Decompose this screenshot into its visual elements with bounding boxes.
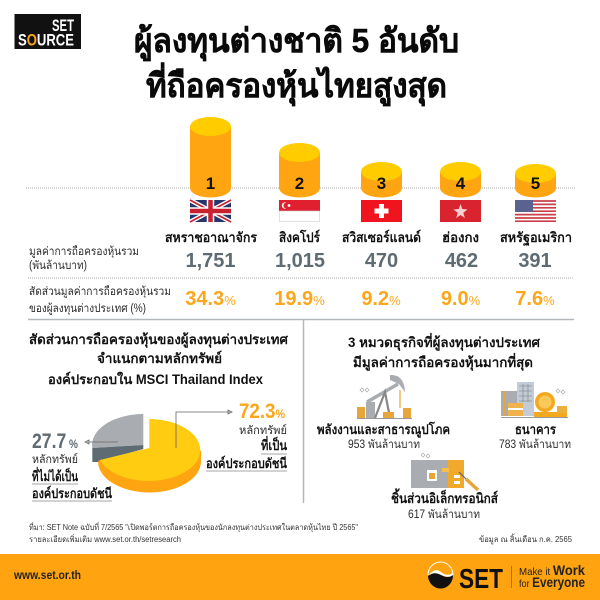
panel heading: องค์ประกอบใน MSCI Thailand Index [48, 371, 263, 387]
holding values: 462 [445, 250, 478, 272]
row label: share: ของผู้ลงทุนต่างประเทศ (%) [29, 302, 146, 315]
cylinder 5 [515, 164, 556, 198]
country names: สหรัฐอเมริกา [500, 230, 572, 247]
row label: holding value [29, 245, 139, 272]
share values [185, 288, 555, 310]
share values: 9.0% [441, 288, 481, 310]
share values: 19.9% [274, 288, 325, 310]
sector: energy [317, 420, 450, 451]
panel heading [29, 332, 288, 387]
tagline: for Everyone [519, 575, 585, 590]
country names: ฮ่องกง [442, 230, 479, 245]
holding values: 391 [518, 250, 552, 272]
cylinder 2 [279, 143, 320, 198]
flag: Singapore [279, 200, 320, 222]
share values: 9.2% [361, 288, 401, 310]
panel heading: มีมูลค่าการถือครองหุ้นมากที่สุด [353, 352, 533, 371]
sector: banking [499, 422, 571, 451]
SET logo: SET [459, 563, 503, 594]
title [134, 22, 459, 107]
callout: 27.7%: 27.7 % [32, 430, 78, 453]
arrow: to 27.7% [85, 440, 118, 444]
panel heading [348, 332, 540, 371]
cylinder 4 [440, 162, 481, 198]
flag: Hong Kong [440, 200, 481, 222]
cylinder 5: 5 [531, 174, 540, 193]
callout: 72.3%: องค์ประกอบดัชนี [206, 455, 288, 471]
share values: 7.6% [515, 288, 555, 310]
holding values: 1,015 [275, 250, 325, 272]
icon: bank and coins [501, 382, 568, 418]
sector: banking: 783 พันล้านบาท [499, 438, 571, 451]
holding values [185, 250, 552, 272]
logo: SET Source: SET [52, 16, 74, 35]
bar chart: cylinders [190, 117, 556, 198]
sector: energy: พลังงานและสาธารณูปโภค [317, 420, 450, 438]
panel: ownership by index membership [29, 332, 288, 501]
panel: top 3 sectors [317, 332, 571, 521]
icon: electronic board [411, 453, 478, 490]
footer band [0, 554, 600, 600]
cylinder 2: 2 [295, 174, 304, 193]
share values: 34.3% [185, 288, 236, 310]
callout: 72.3%: ที่เป็น [261, 435, 288, 453]
panel heading: 3 หมวดธุรกิจที่ผู้ลงทุนต่างประเทศ [348, 332, 540, 351]
cylinder 1: 1 [206, 174, 215, 193]
tagline: Make it Work [519, 562, 585, 578]
panel heading: จำแนกตามหลักทรัพย์ [97, 350, 222, 366]
panel heading: สัดส่วนการถือครองหุ้นของผู้ลงทุนต่างประเทศ [29, 332, 288, 348]
callout: 27.7%: องค์ประกอบดัชนี [32, 485, 113, 501]
callout: 72.3%: 72.3% [239, 400, 285, 423]
sector: energy: 953 พันล้านบาท [348, 438, 420, 451]
row label: holding value: มูลค่าการถือครองหุ้นรวม [29, 245, 139, 258]
row label: share: สัดส่วนมูลค่าการถือครองหุ้นรวม [29, 285, 171, 298]
arrow: to 72.3% [176, 410, 232, 448]
cylinder 1 [190, 117, 231, 198]
icon: oil pump [357, 375, 412, 419]
SET logo [428, 562, 503, 594]
callout: 27.7%: หลักทรัพย์ [32, 452, 78, 466]
row label: holding value: (พันล้านบาท) [29, 259, 87, 272]
country names: สิงคโปร์ [279, 228, 321, 245]
title: ผู้ลงทุนต่างชาติ 5 อันดับ [134, 22, 459, 62]
callout: 72.3% [206, 400, 288, 471]
website: www.set.or.th [13, 568, 81, 582]
cylinder 3 [361, 162, 402, 198]
row label: share [29, 285, 171, 315]
pie chart [92, 414, 201, 492]
cylinder 4: 4 [456, 174, 466, 193]
country names [165, 228, 572, 247]
logo: SET Source: SOURCE [18, 30, 74, 50]
source note [29, 521, 358, 544]
sector: banking: ธนาคาร [515, 422, 557, 437]
source note: ที่มา: SET Note ฉบับที่ 7/2565 "เปิดพอร์ตการถือครองหุ้นของนักลงทุนต่างประเทศในตลาดหุ้นไทย ปี 2565" [29, 521, 358, 532]
callout: 27.7% [32, 430, 113, 501]
country names: สวิสเซอร์แลนด์ [342, 229, 421, 245]
title: ที่ถือครองหุ้นไทยสูงสุด [146, 62, 447, 107]
sector: electronics: ชิ้นส่วนอิเล็กทรอนิกส์ [391, 488, 499, 506]
sector: electronics [391, 488, 499, 521]
source note: รายละเอียดเพิ่มเติม www.set.or.th/setresearch [29, 533, 181, 544]
tagline [519, 562, 585, 590]
data date note: ข้อมูล ณ สิ้นเดือน ก.ค. 2565 [479, 533, 573, 545]
flag: Switzerland [361, 200, 402, 222]
holding values: 470 [365, 250, 398, 272]
logo: SET Source [14, 14, 81, 50]
flag: United Kingdom [190, 200, 231, 222]
callout: 72.3%: หลักทรัพย์ [239, 423, 287, 437]
holding values: 1,751 [185, 250, 236, 272]
country names: สหราชอาณาจักร [165, 230, 258, 245]
cylinder 3: 3 [377, 174, 386, 193]
callout: 27.7%: ที่ไม่ได้เป็น [32, 466, 79, 484]
flag: United States [515, 200, 556, 222]
sector: electronics: 617 พันล้านบาท [408, 508, 480, 521]
